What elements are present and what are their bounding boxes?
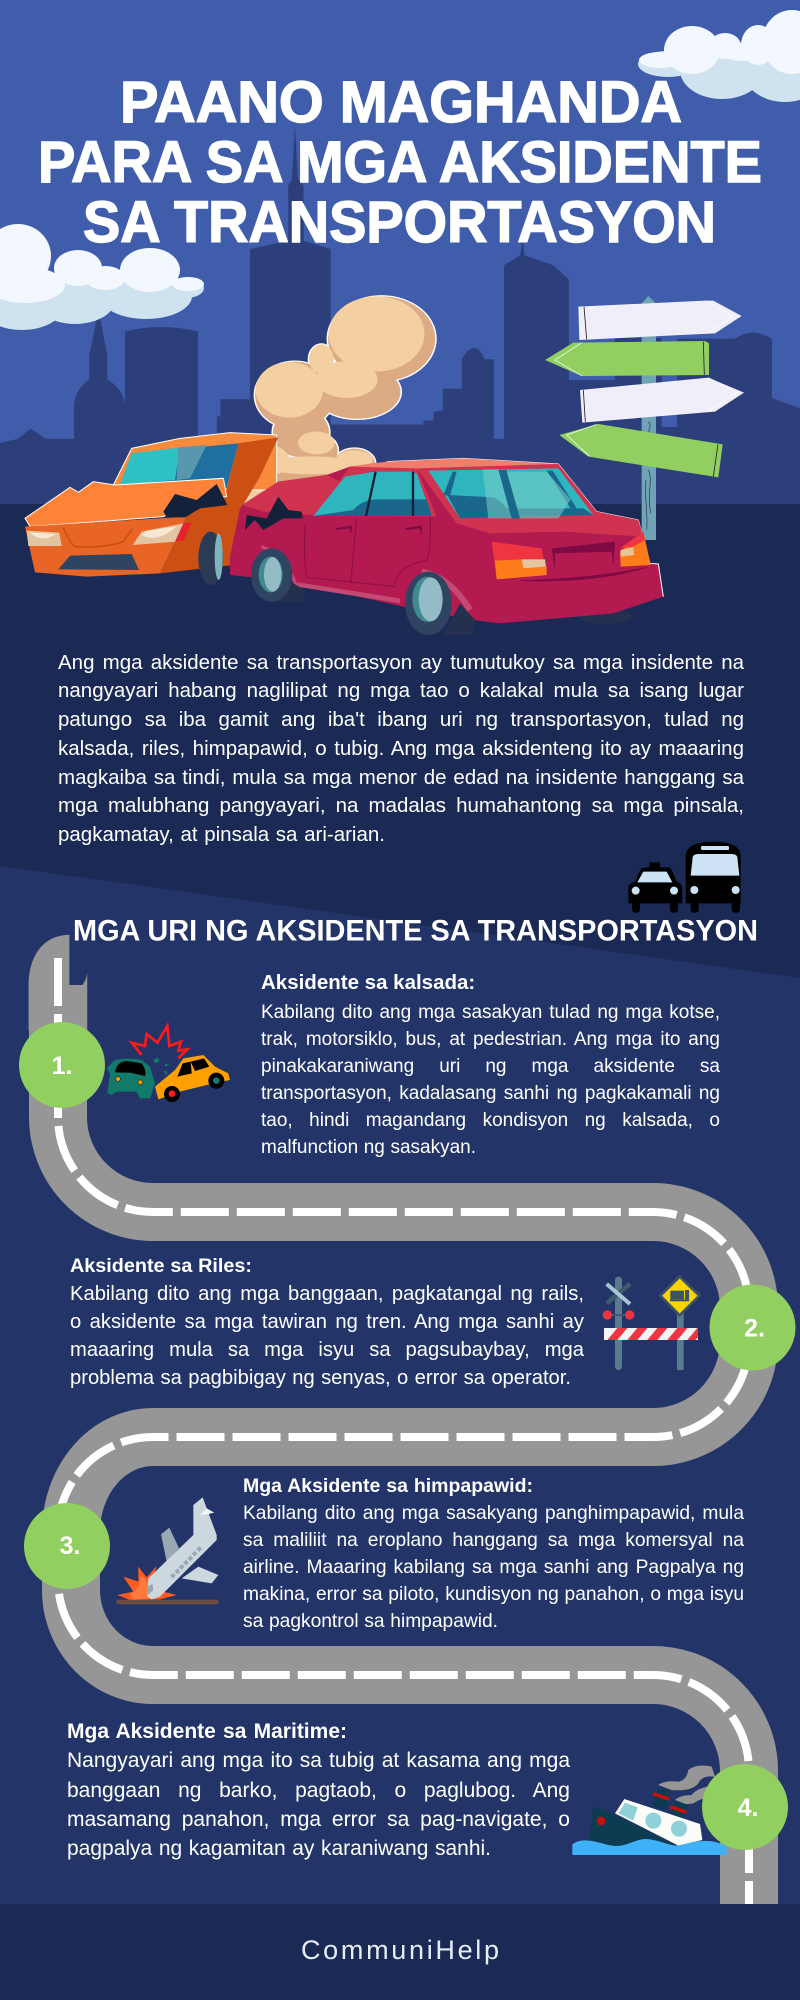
intro paragraph: Ang mga aksidente sa transportasyon ay tumutukoy sa mga insidente na [58, 650, 744, 674]
smoke cloud [241, 296, 435, 508]
road accidents text: Aksidente sa kalsada: [261, 971, 475, 994]
road accidents text: pinakakaraniwang uri ng mga aksidente sa [261, 1056, 720, 1077]
step marker 1: 1. [52, 1052, 72, 1080]
air accidents text: makina, error sa piloto, kundisyon ng panahon, o mga isyu [243, 1584, 744, 1605]
cloud: top right [638, 10, 800, 102]
air accidents text: airline. Maaaring kabilang sa mga sanhi ang Pagpalya ng [243, 1557, 744, 1578]
air accidents text: sa pagkontrol sa himpapawid. [243, 1611, 498, 1632]
step marker 3: 3. [60, 1532, 80, 1560]
orange car [25, 433, 278, 585]
icon: taxi and bus [628, 842, 741, 913]
section heading: MGA URI NG AKSIDENTE SA TRANSPORTASYON [73, 914, 758, 948]
winding road [29, 935, 749, 1904]
maritime accidents text [67, 1720, 570, 1860]
intro paragraph: pagkamatay, at pinsala sa ari-arian. [58, 823, 385, 846]
lower panel background [0, 866, 800, 1904]
intro paragraph [58, 650, 744, 846]
red car [230, 458, 663, 635]
step marker 2: 2. [744, 1314, 765, 1342]
air accidents text [243, 1475, 744, 1632]
rail accidents text: Kabilang dito ang mga banggaan, pagkatangal ng rails, [70, 1283, 584, 1305]
road accidents text [261, 971, 720, 1158]
footer brand: CommuniHelp [301, 1935, 499, 1965]
air accidents text: Kabilang dito ang mga sasakyang panghimpapawid, mula [243, 1503, 744, 1524]
rail accidents text: problema sa pagbibigay ng senyas, o error sa operator. [70, 1367, 571, 1389]
icon: railway crossing [603, 1277, 699, 1370]
road accidents text: trak, motorsiklo, bus, at pedestrian. Ang mga ito ang [261, 1029, 720, 1050]
step marker 1 [19, 1022, 105, 1108]
road accidents text: transportasyon, kadalasang sanhi ng pagkakamali ng [261, 1083, 720, 1104]
rail accidents text: maaaring mula sa mga isyu sa pagsubaybay, mga [70, 1339, 584, 1361]
icon: sinking ship [572, 1766, 727, 1855]
intro paragraph: kalsada, riles, himpapawid, o tubig. Ang mga aksidenteng ito ay maaaring [58, 737, 744, 760]
step marker 4 [702, 1764, 788, 1850]
signpost with arrows [545, 296, 744, 540]
title: PARA SA MGA AKSIDENTE [38, 130, 762, 195]
air accidents text: Mga Aksidente sa himpapawid: [243, 1475, 533, 1497]
title: SA TRANSPORTASYON [83, 190, 716, 255]
city skyline [0, 125, 800, 506]
cloud: left [0, 224, 204, 330]
step marker 3 [24, 1503, 110, 1589]
step marker 4: 4. [738, 1794, 758, 1822]
air accidents text: sa maliliit na eroplano hanggang sa mga komersyal na [243, 1530, 744, 1551]
road accidents text: tao, hindi magandang kondisyon ng kalsada, o [261, 1110, 720, 1131]
intro paragraph: mga malubhang pangyayari, na madalas humahantong sa mga pinsala, [58, 794, 744, 817]
footer band [0, 1904, 800, 2000]
maritime accidents text: banggaan ng barko, pagtaob, o paglubog. Ang [67, 1779, 570, 1802]
icon: plane crash [117, 1497, 218, 1604]
sky background [0, 0, 800, 510]
maritime accidents text: pagpalya ng kagamitan ay karaniwang sanhi. [67, 1837, 491, 1860]
intro paragraph: nangyayari habang naglilipat ng mga tao o kalakal mula sa isang lugar [58, 679, 744, 702]
intro paragraph: patungo sa iba gamit ang iba't ibang uri ng transportasyon, tulad ng [58, 708, 744, 731]
rail accidents text [70, 1255, 584, 1389]
maritime accidents text: Mga Aksidente sa Maritime: [67, 1720, 347, 1743]
rail accidents text: o aksidente sa mga tawiran ng tren. Ang mga sanhi ay [70, 1311, 584, 1333]
icon: road collision [107, 1026, 230, 1102]
intro paragraph: magkaiba sa tindi, mula sa mga menor de edad na insidente hanggang sa [58, 766, 744, 789]
road accidents text: malfunction ng sasakyan. [261, 1137, 476, 1158]
dark ground [0, 504, 800, 904]
maritime accidents text: Nangyayari ang mga ito sa tubig at kasama ang mga [67, 1749, 570, 1772]
step marker 2 [710, 1284, 796, 1370]
title: PAANO MAGHANDA [120, 70, 682, 135]
maritime accidents text: masamang panahon, mga error sa pag-navigate, o [67, 1808, 570, 1831]
rail accidents text: Aksidente sa Riles: [70, 1255, 252, 1277]
road accidents text: Kabilang dito ang mga sasakyan tulad ng mga kotse, [261, 1002, 720, 1023]
title [38, 70, 762, 255]
